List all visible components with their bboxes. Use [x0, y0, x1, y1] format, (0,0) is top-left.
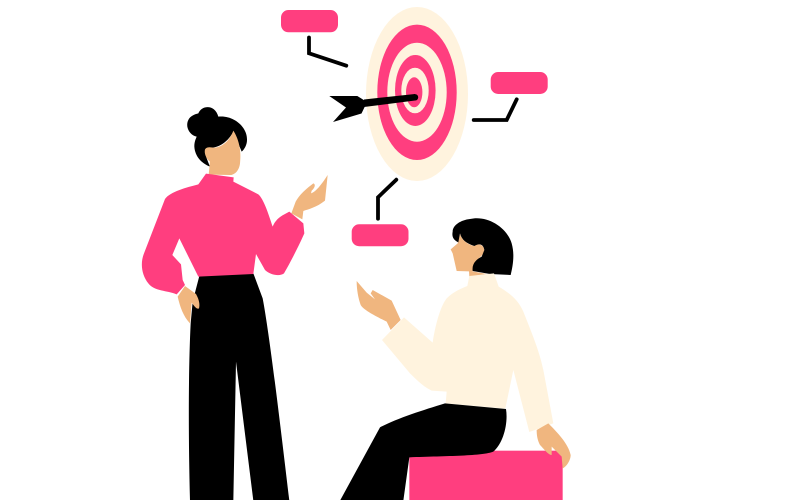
- connector: top tag to target: [309, 38, 346, 66]
- figure: standing woman: [142, 107, 328, 500]
- label: bottom pink tag: [352, 224, 408, 246]
- icon: bullseye target: [366, 7, 468, 181]
- hair with bun: [187, 107, 247, 167]
- face and neck: [205, 131, 240, 175]
- cream sweater: [382, 273, 553, 432]
- raised hand: [291, 175, 328, 219]
- pink box seat: [409, 451, 563, 500]
- icon: dart arrow: [329, 94, 418, 122]
- trousers: [189, 273, 289, 500]
- connector: bottom tag to target: [378, 180, 396, 219]
- connector: right tag to target: [474, 99, 517, 120]
- label: top pink tag: [281, 10, 338, 32]
- raised hand: [357, 281, 401, 330]
- hand on box: [537, 423, 571, 468]
- black trousers: [340, 403, 507, 500]
- pink blouse: [142, 174, 304, 294]
- hand on hip: [178, 286, 199, 323]
- label: right pink tag: [491, 72, 548, 94]
- figure: seated woman on pink box: [340, 218, 571, 500]
- face and neck: [451, 234, 487, 277]
- bob hair: [452, 218, 513, 275]
- panel: target with labels: [281, 7, 548, 246]
